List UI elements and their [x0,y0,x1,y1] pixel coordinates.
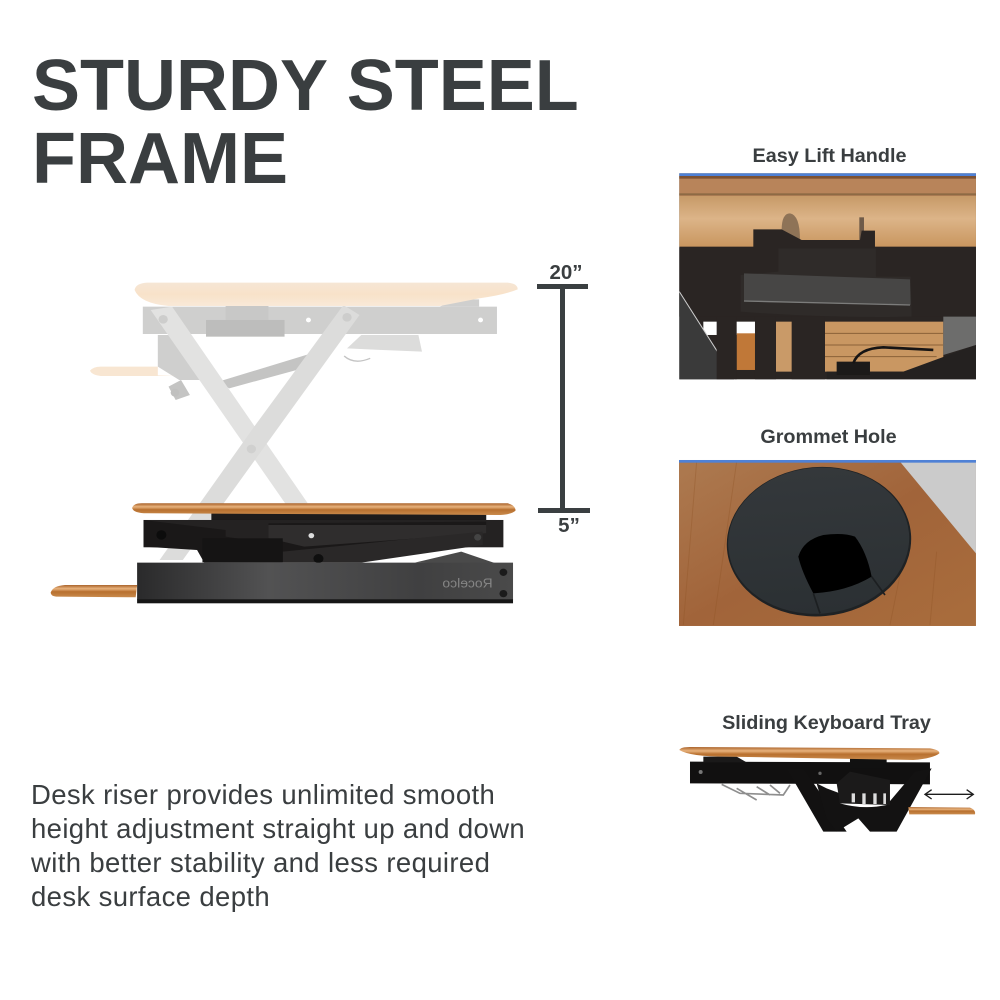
title: STURDY STEEL [32,46,579,126]
brand mark: Rocelco [442,576,493,590]
label: 5 inches: 5” [558,514,580,537]
description text: with better stability and less required [30,847,490,878]
panel: easy lift handle photo [679,173,976,379]
description text: desk surface depth [31,881,270,912]
heading: easy lift handle: Easy Lift Handle [753,145,906,167]
label: 20 inches: 20” [549,261,583,284]
panel: sliding keyboard tray photo [679,747,975,832]
heading: sliding keyboard tray: Sliding Keyboard Tray [722,712,931,734]
title: FRAME [32,119,288,199]
desk riser photo [51,283,518,603]
lowered desk [51,503,516,603]
double arrow [925,790,973,799]
height scale [537,261,590,537]
heading: grommet hole: Grommet Hole [760,426,897,448]
description text [30,779,525,912]
title [32,46,579,199]
panel: grommet hole photo [679,459,976,626]
description text: Desk riser provides unlimited smooth [31,779,495,810]
grommet disc [721,459,917,624]
raised desk ghost [90,283,518,560]
description text: height adjustment straight up and down [31,813,525,844]
